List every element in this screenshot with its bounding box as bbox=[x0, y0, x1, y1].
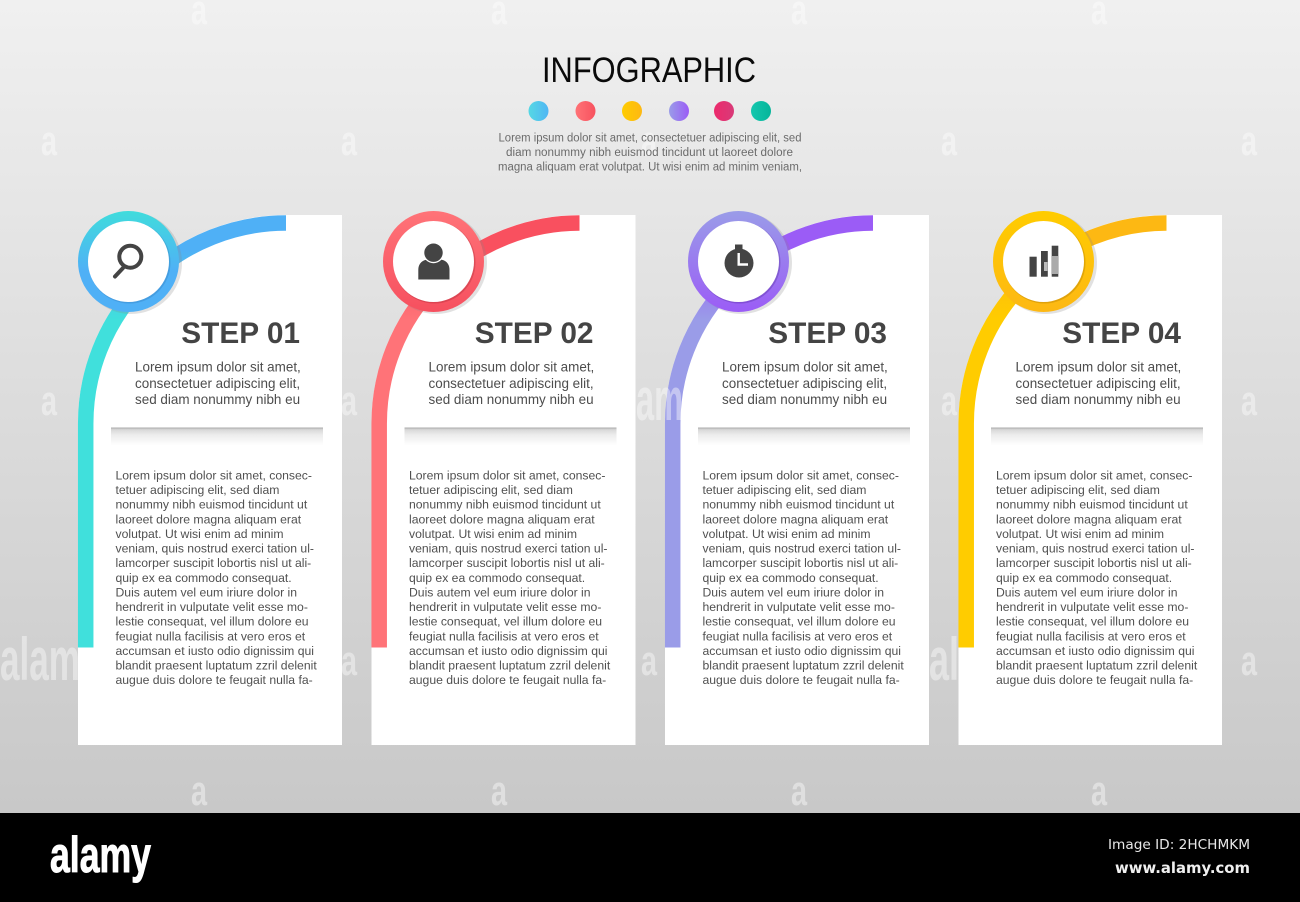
title: INFOGRAPHIC bbox=[542, 51, 756, 90]
card background bbox=[958, 215, 1222, 745]
divider shadow bbox=[698, 428, 910, 446]
summary text: consectetuer adipiscing elit, bbox=[1016, 376, 1181, 391]
watermark over arc: am bbox=[636, 366, 683, 433]
divider shadow bbox=[991, 428, 1203, 446]
summary text: consectetuer adipiscing elit, bbox=[428, 376, 594, 391]
body text: accumsan et iusto odio dignissim qui bbox=[702, 644, 901, 658]
body text: blandit praesent luptatum zzril delenit bbox=[702, 659, 904, 673]
coloured arc bbox=[673, 223, 873, 648]
body text: tetuer adipiscing elit, sed diam bbox=[702, 483, 866, 497]
watermark: a bbox=[1241, 377, 1257, 424]
body text: augue duis dolore te feugait nulla fa- bbox=[116, 673, 313, 687]
body text: lestie consequat, vel illum dolore eu bbox=[116, 615, 309, 629]
summary text: sed diam nonummy nibh eu bbox=[428, 392, 594, 407]
coloured arc bbox=[379, 223, 580, 648]
body text: tetuer adipiscing elit, sed diam bbox=[996, 483, 1160, 497]
body text: veniam, quis nostrud exerci tation ul- bbox=[116, 542, 314, 556]
body text: nonummy nibh euismod tincidunt ut bbox=[702, 498, 895, 512]
icon: bar chart bbox=[1030, 246, 1058, 277]
panel: step 02 bbox=[372, 211, 636, 745]
body text: feugiat nulla facilisis at vero eros et bbox=[409, 629, 599, 643]
watermark: a bbox=[1091, 767, 1107, 814]
body text: feugiat nulla facilisis at vero eros et bbox=[702, 629, 893, 643]
body text: accumsan et iusto odio dignissim qui bbox=[409, 644, 608, 658]
watermark: a bbox=[941, 377, 957, 424]
panel: step 01 bbox=[78, 211, 342, 745]
body text: augue duis dolore te feugait nulla fa- bbox=[409, 673, 606, 687]
body text: lestie consequat, vel illum dolore eu bbox=[409, 615, 602, 629]
body text: Duis autem vel eum iriure dolor in bbox=[702, 585, 884, 599]
body text: Duis autem vel eum iriure dolor in bbox=[409, 585, 591, 599]
body text: nonummy nibh euismod tincidunt ut bbox=[116, 498, 308, 512]
watermark: a bbox=[191, 767, 207, 814]
watermark: a bbox=[41, 117, 57, 164]
body text: lestie consequat, vel illum dolore eu bbox=[996, 615, 1189, 629]
body text: feugiat nulla facilisis at vero eros et bbox=[116, 629, 306, 643]
body text: augue duis dolore te feugait nulla fa- bbox=[702, 673, 900, 687]
icon: magnifier bbox=[115, 246, 141, 276]
watermark: a bbox=[1241, 117, 1257, 164]
body text: volutpat. Ut wisi enim ad minim bbox=[116, 527, 283, 541]
body text: volutpat. Ut wisi enim ad minim bbox=[409, 527, 577, 541]
body text: feugiat nulla facilisis at vero eros et bbox=[996, 629, 1186, 643]
watermark: a bbox=[941, 117, 957, 164]
body text: blandit praesent luptatum zzril delenit bbox=[409, 659, 611, 673]
coloured arc bbox=[86, 223, 286, 648]
intro text bbox=[498, 132, 802, 174]
body text: laoreet dolore magna aliquam erat bbox=[409, 512, 595, 526]
body text: nonummy nibh euismod tincidunt ut bbox=[409, 498, 601, 512]
watermark: al bbox=[929, 626, 959, 693]
card background bbox=[665, 215, 929, 745]
body text: lamcorper suscipit lobortis nisl ut ali- bbox=[409, 556, 605, 570]
footer bar bbox=[0, 813, 1300, 902]
body text: hendrerit in vulputate velit esse mo- bbox=[702, 600, 895, 614]
watermark: a bbox=[491, 767, 507, 814]
summary text: Lorem ipsum dolor sit amet, bbox=[722, 360, 888, 374]
body text: accumsan et iusto odio dignissim qui bbox=[996, 644, 1194, 658]
watermark: alam bbox=[0, 626, 80, 693]
summary text: consectetuer adipiscing elit, bbox=[722, 376, 887, 391]
icon ring bbox=[993, 211, 1097, 314]
icon ring bbox=[383, 211, 487, 314]
body text: lamcorper suscipit lobortis nisl ut ali- bbox=[116, 556, 311, 570]
summary text: Lorem ipsum dolor sit amet, bbox=[428, 360, 594, 374]
body text: volutpat. Ut wisi enim ad minim bbox=[996, 527, 1164, 541]
summary text: Lorem ipsum dolor sit amet, bbox=[1016, 360, 1181, 374]
body text: Lorem ipsum dolor sit amet, consec- bbox=[116, 468, 312, 482]
icon: stopwatch bbox=[724, 244, 754, 278]
intro text: diam nonummy nibh euismod tincidunt ut laoreet dolore bbox=[506, 147, 793, 159]
body text: laoreet dolore magna aliquam erat bbox=[702, 512, 889, 526]
body text: tetuer adipiscing elit, sed diam bbox=[409, 483, 573, 497]
body text: veniam, quis nostrud exerci tation ul- bbox=[409, 542, 607, 556]
body text: lamcorper suscipit lobortis nisl ut ali- bbox=[702, 556, 898, 570]
body text: accumsan et iusto odio dignissim qui bbox=[116, 644, 314, 658]
intro text: magna aliquam erat volutpat. Ut wisi enim ad minim veniam, bbox=[498, 162, 802, 174]
body text: volutpat. Ut wisi enim ad minim bbox=[702, 527, 870, 541]
footer logo: alamy bbox=[50, 827, 151, 883]
panel: step 04 bbox=[958, 211, 1222, 745]
icon ring bbox=[688, 211, 792, 314]
body text: Duis autem vel eum iriure dolor in bbox=[996, 585, 1178, 599]
body text: Lorem ipsum dolor sit amet, consec- bbox=[702, 468, 899, 482]
watermark: a bbox=[641, 637, 657, 684]
summary text: sed diam nonummy nibh eu bbox=[1016, 392, 1181, 407]
body text: blandit praesent luptatum zzril delenit bbox=[996, 659, 1198, 673]
body text: quip ex ea commodo consequat. bbox=[702, 571, 879, 585]
heading: STEP 03 bbox=[768, 317, 887, 350]
colour dots bbox=[528, 101, 771, 121]
body text: hendrerit in vulputate velit esse mo- bbox=[996, 600, 1188, 614]
watermark: a bbox=[1241, 637, 1257, 684]
body text: augue duis dolore te feugait nulla fa- bbox=[996, 673, 1193, 687]
summary text: consectetuer adipiscing elit, bbox=[135, 376, 300, 391]
card background bbox=[78, 215, 342, 745]
heading: STEP 04 bbox=[1062, 317, 1181, 350]
card background bbox=[372, 215, 636, 745]
watermark: a bbox=[341, 117, 357, 164]
body text: Lorem ipsum dolor sit amet, consec- bbox=[409, 468, 605, 482]
body text: hendrerit in vulputate velit esse mo- bbox=[116, 600, 308, 614]
watermark: a bbox=[641, 117, 657, 164]
icon ring bbox=[78, 211, 182, 314]
body text: tetuer adipiscing elit, sed diam bbox=[116, 483, 279, 497]
icon: person bbox=[418, 242, 450, 280]
body text: laoreet dolore magna aliquam erat bbox=[116, 512, 302, 526]
body text: lestie consequat, vel illum dolore eu bbox=[702, 615, 896, 629]
divider shadow bbox=[111, 428, 323, 446]
watermark: a bbox=[341, 637, 357, 684]
image id: Image ID: 2HCHMKM bbox=[1108, 837, 1250, 853]
summary text: sed diam nonummy nibh eu bbox=[135, 392, 300, 407]
watermark: a bbox=[41, 377, 57, 424]
body text: laoreet dolore magna aliquam erat bbox=[996, 512, 1182, 526]
summary text: sed diam nonummy nibh eu bbox=[722, 392, 887, 407]
watermark: a bbox=[791, 767, 807, 814]
body text: blandit praesent luptatum zzril delenit bbox=[116, 659, 317, 673]
body text: hendrerit in vulputate velit esse mo- bbox=[409, 600, 601, 614]
website: www.alamy.com bbox=[1115, 859, 1250, 877]
body text: veniam, quis nostrud exerci tation ul- bbox=[702, 542, 901, 556]
intro text: Lorem ipsum dolor sit amet, consectetuer adipiscing elit, sed bbox=[498, 132, 802, 144]
heading: STEP 02 bbox=[475, 317, 594, 350]
body text: nonummy nibh euismod tincidunt ut bbox=[996, 498, 1188, 512]
body text: lamcorper suscipit lobortis nisl ut ali- bbox=[996, 556, 1192, 570]
heading: STEP 01 bbox=[181, 317, 300, 350]
body text: quip ex ea commodo consequat. bbox=[996, 571, 1172, 585]
body text: Duis autem vel eum iriure dolor in bbox=[116, 585, 297, 599]
divider shadow bbox=[404, 428, 616, 446]
body text: veniam, quis nostrud exerci tation ul- bbox=[996, 542, 1194, 556]
coloured arc bbox=[966, 223, 1166, 648]
body text: quip ex ea commodo consequat. bbox=[116, 571, 292, 585]
panel: step 03 bbox=[665, 211, 929, 745]
watermark: a bbox=[341, 377, 357, 424]
summary text: Lorem ipsum dolor sit amet, bbox=[135, 360, 301, 374]
body text: quip ex ea commodo consequat. bbox=[409, 571, 585, 585]
body text: Lorem ipsum dolor sit amet, consec- bbox=[996, 468, 1192, 482]
